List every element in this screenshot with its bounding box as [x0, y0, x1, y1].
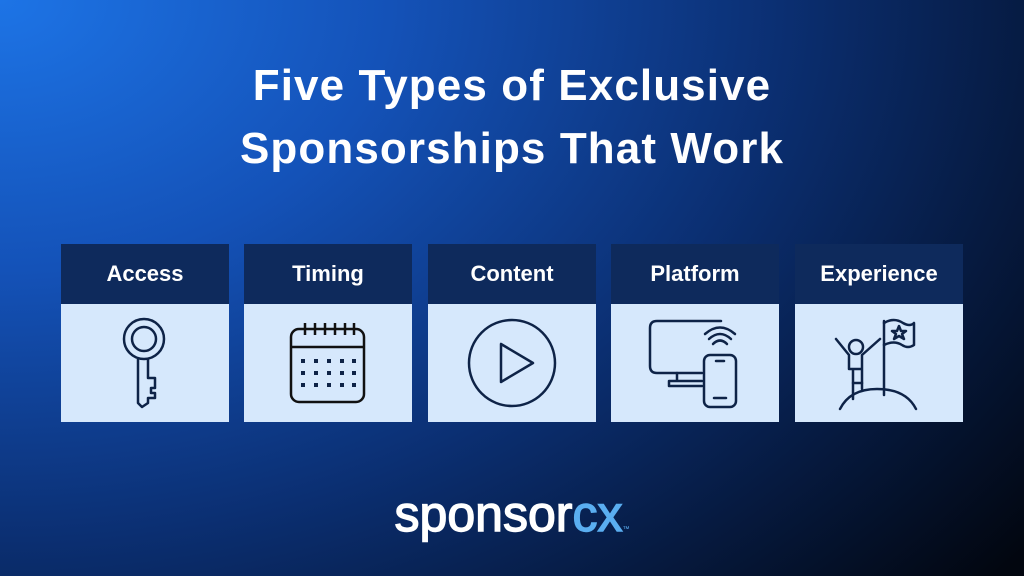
icon: key [122, 318, 166, 408]
card: Access: Access [106, 261, 184, 286]
title: Sponsorships That Work [240, 124, 784, 173]
title [240, 61, 784, 173]
card: Timing: Timing [292, 261, 364, 286]
icon: play button [468, 318, 556, 408]
card: Content [428, 244, 596, 422]
card: Content: Content [470, 261, 554, 286]
card: Experience [795, 244, 963, 422]
card: Timing [244, 244, 412, 422]
title: Five Types of Exclusive [253, 61, 771, 110]
card: Platform [611, 244, 779, 422]
icon: person with flag on hill [834, 318, 918, 410]
logo: sponsorcx: sponsorcx™ [395, 486, 629, 542]
card: Access [61, 244, 229, 422]
icon: calendar [290, 323, 366, 404]
card: Experience: Experience [820, 261, 938, 286]
icon: monitor and phone [648, 320, 738, 408]
card: Platform: Platform [650, 261, 740, 286]
